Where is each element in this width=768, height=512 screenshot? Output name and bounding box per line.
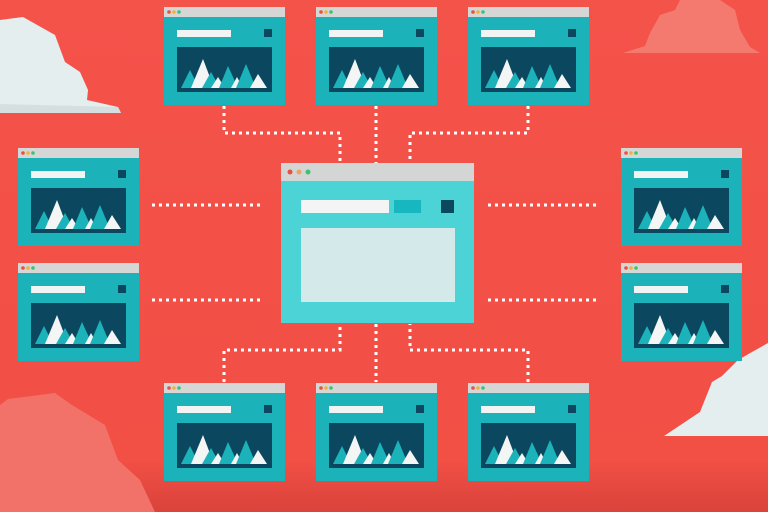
- central browser window: [281, 163, 474, 323]
- cloud: top right: [623, 0, 760, 53]
- cloud: bottom right: [664, 343, 768, 436]
- window: bottom 3: [468, 383, 589, 481]
- window: right 2: [621, 263, 742, 361]
- cloud: bottom left: [0, 393, 155, 512]
- cloud: top left: [0, 17, 121, 113]
- connectors: dotted lines: [152, 106, 598, 382]
- window: bottom 2: [316, 383, 437, 481]
- window: top 1: [164, 7, 285, 105]
- window: right 1: [621, 148, 742, 246]
- window: bottom 1: [164, 383, 285, 481]
- window: left 2: [18, 263, 139, 361]
- window: left 1: [18, 148, 139, 246]
- window: top 2: [316, 7, 437, 105]
- window: top 3: [468, 7, 589, 105]
